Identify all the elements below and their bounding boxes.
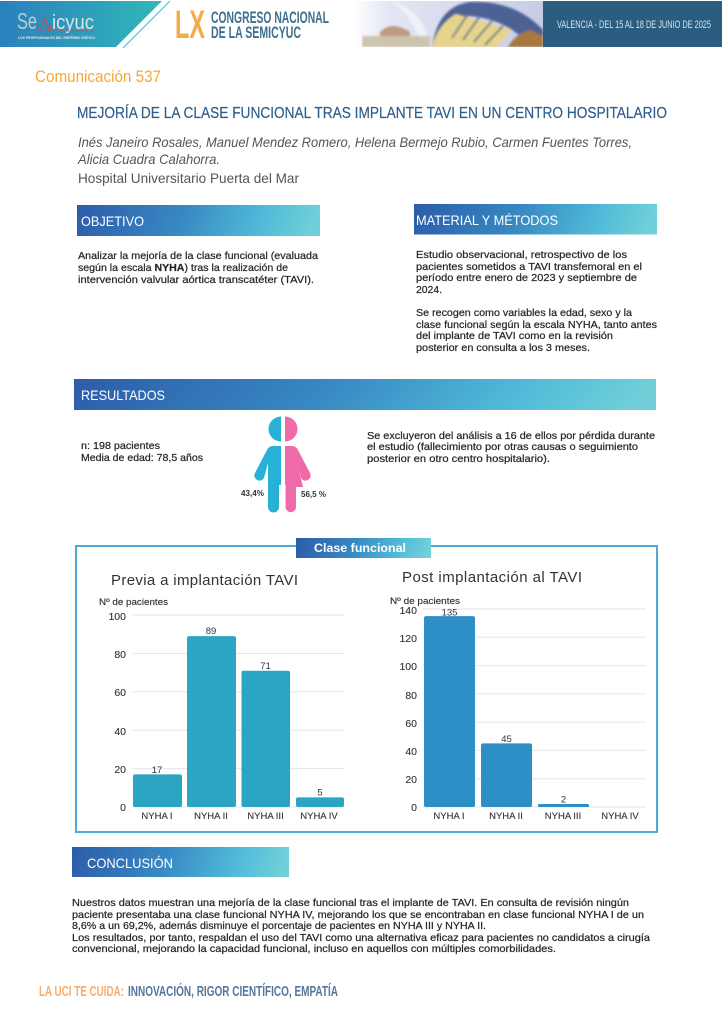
authors: Inés Janeiro Rosales, Manuel Mendez Romero, Helena Bermejo Rubio, Carmen Fuentes Torres, <box>78 134 632 150</box>
footer slogan: LA UCI TE CUIDA: <box>39 984 124 1000</box>
conclusión text <box>72 897 650 955</box>
material y métodos text: Se recogen como variables la edad, sexo y la <box>416 307 632 319</box>
panel: resultados heading <box>74 379 656 410</box>
panel: material y métodos heading <box>414 204 657 234</box>
y axis title: Nº de pacientes <box>390 596 461 606</box>
bars <box>424 616 589 807</box>
material y métodos text: Estudio observacional, retrospectivo de los <box>416 249 627 261</box>
y axis labels: 80 <box>405 690 417 702</box>
objetivo text <box>78 250 318 286</box>
y axis labels: 20 <box>114 764 126 776</box>
clase funcional tag <box>296 538 431 558</box>
bars <box>133 636 344 807</box>
panel: conclusión heading <box>72 847 289 877</box>
exclusions text: el estudio (fallecimiento por otras causas o seguimiento <box>367 441 638 453</box>
value labels: 45 <box>501 734 512 745</box>
patient count and age <box>81 440 203 464</box>
y axis labels: 60 <box>405 718 417 730</box>
y axis labels: 0 <box>120 802 126 814</box>
y axis labels: 80 <box>114 649 126 661</box>
value labels: 71 <box>260 661 271 672</box>
congress name: DE LA SEMICYUC <box>211 23 301 42</box>
x axis labels: NYHA III <box>545 811 581 822</box>
value labels: 2 <box>561 794 566 806</box>
x axis labels <box>433 811 639 822</box>
authors: Alicia Cuadra Calahorra. <box>77 151 220 167</box>
y axis labels: 100 <box>399 661 417 673</box>
conclusión text: convencional, mejorando la capacidad funcional, incluso en aquellos con múltiples comorbilidades. <box>72 943 556 955</box>
congress name: LX <box>175 3 205 47</box>
material y métodos text: clase funcional según la escala NYHA, tanto antes <box>416 319 657 331</box>
material y métodos text: 2024. <box>416 284 442 296</box>
patient count and age: Media de edad: 78,5 años <box>81 452 203 464</box>
panel: objetivo heading: OBJETIVO <box>81 213 144 229</box>
percent labels <box>241 488 326 499</box>
male half <box>254 416 281 512</box>
value labels: 89 <box>206 626 216 637</box>
percent labels: 56,5 % <box>301 489 326 499</box>
y axis labels: 60 <box>114 687 126 699</box>
x axis labels: NYHA II <box>194 811 228 822</box>
logo band: LOS PROFESIONALES DEL ENFERMO CRÍTICO <box>18 35 95 40</box>
logo band: icyuc <box>52 12 94 34</box>
conclusión text: 8,6% a un 69,2%, además disminuye el porcentaje de pacientes en NYHA III y NYHA II. <box>72 920 486 932</box>
material y métodos text: posterior en consulta a los 3 meses. <box>416 342 590 354</box>
percent labels: 43,4% <box>241 488 264 498</box>
conclusión text: paciente presentaba una clase funcional NYHA IV, mejorando los que se encontraban en clase funcional NYHA I de un <box>72 909 644 921</box>
communication number: Comunicación 537 <box>35 68 161 86</box>
footer slogan <box>39 982 338 1000</box>
y axis labels <box>399 605 417 814</box>
bar chart: post implantación <box>390 569 646 822</box>
logo band <box>0 1 170 48</box>
hospital: Hospital Universitario Puerta del Mar <box>78 170 299 186</box>
y axis labels <box>108 611 126 814</box>
x axis labels: NYHA II <box>489 811 523 822</box>
header banner <box>0 1 722 48</box>
y axis labels: 20 <box>405 774 417 786</box>
value labels: 17 <box>152 765 162 776</box>
chart title: Previa a implantación TAVI <box>111 572 298 589</box>
y axis labels: 0 <box>411 802 417 814</box>
panel: conclusión heading: CONCLUSIÓN <box>87 855 173 871</box>
y axis labels: 140 <box>399 605 417 617</box>
authors <box>77 134 632 167</box>
y axis labels: 40 <box>405 746 417 758</box>
value labels <box>152 626 323 798</box>
x axis labels: NYHA IV <box>601 811 639 822</box>
x axis labels: NYHA III <box>247 811 284 822</box>
exclusions text: Se excluyeron del análisis a 16 de ellos por pérdida durante <box>367 430 655 442</box>
objetivo text: Analizar la mejoría de la clase funcional (evaluada <box>78 250 318 262</box>
congress name <box>175 3 329 47</box>
chart title: Post implantación al TAVI <box>402 569 582 586</box>
material y métodos text: del implante de TAVI como en la revisión <box>416 330 613 342</box>
valencia architecture photo <box>352 1 543 47</box>
y axis title: Nº de pacientes <box>99 597 169 607</box>
exclusions text: posterior en otro centro hospitalario). <box>367 453 550 465</box>
panel: resultados heading: RESULTADOS <box>81 387 165 403</box>
x axis labels: NYHA I <box>141 811 173 822</box>
objetivo text: según la escala NYHA) tras la realización de <box>78 262 288 274</box>
value labels: 135 <box>442 608 457 618</box>
icon: sex split person <box>241 416 326 512</box>
value labels: 5 <box>317 788 323 798</box>
material y métodos text: período entre enero de 2023 y septiembre de <box>416 272 637 284</box>
date band <box>543 1 722 47</box>
x axis labels: NYHA I <box>433 811 465 822</box>
y axis labels: 120 <box>399 633 417 645</box>
panel: clase funcional <box>76 538 657 832</box>
logo band: Se <box>17 8 37 34</box>
objetivo text: intervención valvular aórtica transcatéter (TAVI). <box>78 274 314 286</box>
conclusión text: Nuestros datos muestran una mejoría de la clase funcional tras el implante de TAVI. En consulta de revisión ningún <box>72 897 629 909</box>
footer slogan: INNOVACIÓN, RIGOR CIENTÍFICO, EMPATÍA <box>128 982 338 1000</box>
x axis labels: NYHA IV <box>300 811 338 822</box>
material y métodos text <box>416 249 657 354</box>
y axis labels: 100 <box>108 611 126 623</box>
panel: material y métodos heading: MATERIAL Y MÉTODOS <box>416 212 558 228</box>
bar chart: previa a implantación <box>99 572 344 822</box>
x axis labels <box>141 811 338 822</box>
clase funcional tag: Clase funcional <box>314 543 406 555</box>
panel: objetivo heading <box>77 205 320 236</box>
y axis labels: 40 <box>114 726 126 738</box>
female half <box>285 416 311 512</box>
value labels <box>442 608 566 806</box>
material y métodos text: pacientes sometidos a TAVI transfemoral en el <box>416 261 642 273</box>
exclusions text <box>367 430 655 465</box>
congress name: CONGRESO NACIONAL <box>211 8 329 27</box>
conclusión text: Los resultados, por tanto, respaldan el uso del TAVI como una alternativa eficaz para pacientes no candidatos a cirugía <box>72 932 650 944</box>
patient count and age: n: 198 pacientes <box>81 440 160 452</box>
